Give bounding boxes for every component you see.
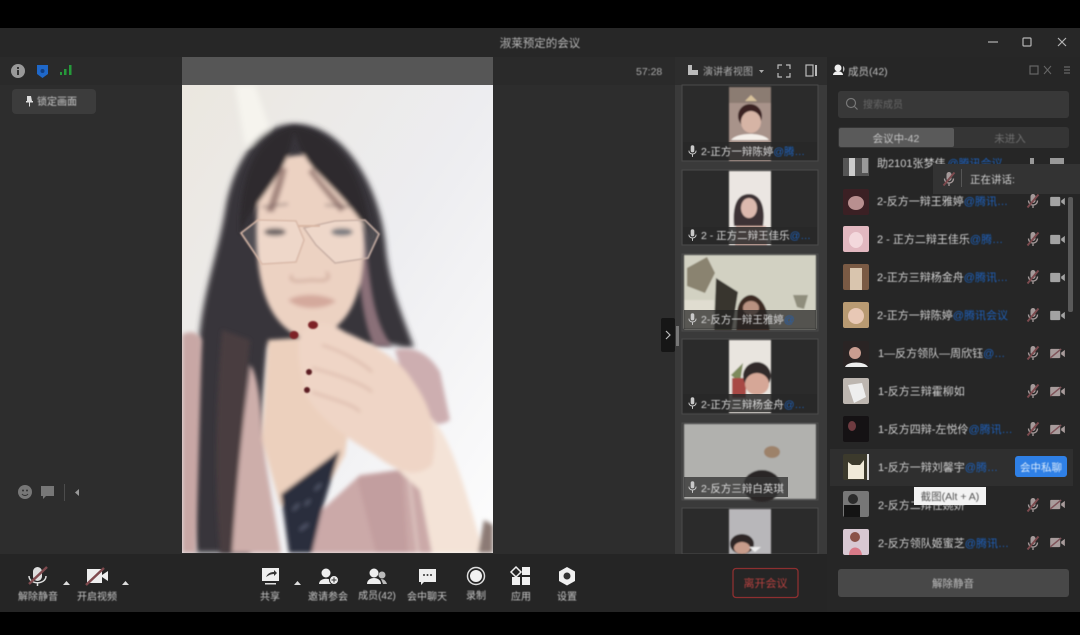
thumbnail 5 xyxy=(682,423,818,502)
face xyxy=(256,155,364,337)
lock view button xyxy=(12,89,96,114)
glasses xyxy=(241,220,304,264)
member row: 2-反方领队姬蜜芝: 2-反方领队姬蜜芝@腾讯… xyxy=(878,536,1009,550)
member tabs xyxy=(838,127,1069,148)
neck and chest xyxy=(262,335,352,505)
member row: 2-反方一辩王雅婷 xyxy=(843,189,1065,215)
unmute all button xyxy=(838,569,1069,597)
chat control: 会中聊天 xyxy=(407,590,447,603)
leave meeting button xyxy=(733,568,798,598)
top toolbar strip xyxy=(0,57,675,85)
member row: 1-反方三辩霍柳如: 1-反方三辩霍柳如 xyxy=(878,384,965,398)
member tabs: 未进入 xyxy=(994,133,1026,145)
invite control: 邀请参会 xyxy=(308,590,348,603)
lips xyxy=(288,295,336,308)
thumbnail 1 xyxy=(682,85,818,161)
record control xyxy=(466,568,486,602)
emoji and chat quick controls xyxy=(18,484,79,501)
hand xyxy=(298,324,435,472)
member tabs: 会议中-42 xyxy=(873,132,919,145)
member row: 2-正方一辩陈婷: 2-正方一辩陈婷@腾讯会议 xyxy=(877,308,1008,322)
nose xyxy=(291,272,329,281)
share control xyxy=(260,568,301,603)
member row: 2-正方三辩杨金舟 xyxy=(843,264,1065,290)
speaking indicator tooltip xyxy=(933,164,1080,194)
bangs xyxy=(240,126,295,235)
jacket right and lapel xyxy=(395,349,450,424)
chat control xyxy=(407,569,447,603)
timer and view controls: 57:28 xyxy=(636,66,662,78)
video header strip xyxy=(182,57,493,85)
start video control: 开启视频 xyxy=(77,590,117,603)
collapse handle xyxy=(661,318,679,352)
member row: 2 - 正方二辩王佳乐: 2 - 正方二辩王佳乐@腾… xyxy=(877,232,1003,246)
thumbnail 2 xyxy=(682,170,818,245)
window controls xyxy=(988,38,1066,46)
eyebrows and eyes xyxy=(262,204,349,207)
members panel xyxy=(827,57,1080,612)
members panel header: 成员(42) xyxy=(848,66,888,78)
member row highlighted: 1-反方一辩刘馨宇: 1-反方一辩刘馨宇@腾… xyxy=(878,460,998,474)
apps control xyxy=(511,567,531,603)
hair back xyxy=(190,124,414,553)
share control: 共享 xyxy=(260,590,280,603)
member row: 2-正方一辩陈婷 xyxy=(843,302,1065,328)
main speaker video xyxy=(182,85,493,553)
settings control: 设置 xyxy=(557,591,577,603)
member row: 2-正方三辩杨金舟: 2-正方三辩杨金舟@腾讯… xyxy=(877,270,1008,284)
member search box xyxy=(838,91,1069,118)
thumbnail 3: 2-反方一辩王雅婷@ xyxy=(701,313,795,326)
lock view button: 锁定画面 xyxy=(37,95,77,108)
thumbnail 5: 2-反方三辩白英琪 xyxy=(701,482,784,495)
member row: 1-反方三辩霍柳如 xyxy=(843,378,1065,404)
thumbnail 3 xyxy=(682,254,818,331)
thumbnail column xyxy=(661,85,827,554)
unmute all button: 解除静音 xyxy=(932,577,974,590)
thumbnail 1: 2-正方一辩陈婷@腾… xyxy=(701,145,805,158)
member row: 2-反方二辩任婉妍: 2-反方二辩任婉妍 xyxy=(878,498,965,512)
arm xyxy=(398,410,480,553)
member row highlighted: 1-反方一辩刘馨宇 xyxy=(830,449,1073,486)
member row: 助2101张梦伟 (clipped) xyxy=(843,156,1064,176)
hair streak tones xyxy=(216,330,250,553)
settings control xyxy=(557,567,577,603)
member row: 1—反方领队—周欣钰: 1—反方领队—周欣钰@… xyxy=(878,346,1005,360)
timer and view controls xyxy=(636,65,817,78)
nails xyxy=(290,331,298,339)
private chat button xyxy=(1015,456,1067,477)
member row: 2-反方领队姬蜜芝 xyxy=(843,529,1065,555)
timer and view controls: 演讲者视图 xyxy=(703,65,753,78)
members control xyxy=(358,568,396,602)
invite control xyxy=(308,568,348,603)
unmute control xyxy=(18,567,70,603)
jacket left xyxy=(182,332,202,553)
title bar xyxy=(0,28,1080,57)
screenshot tooltip xyxy=(914,487,986,505)
thumbnail 6 xyxy=(682,508,818,554)
thumbnail 4 xyxy=(682,339,818,414)
thumbnail 2: 2 - 正方二辩王佳乐@… xyxy=(701,229,811,242)
member row: 2 - 正方二辩王佳乐 xyxy=(843,226,1065,252)
thumbnail 4: 2-正方三辩杨金舟@… xyxy=(701,398,805,411)
panel scrollbar xyxy=(1068,197,1073,312)
speaking indicator tooltip: 正在讲话: xyxy=(970,173,1015,186)
member search box: 搜索成员 xyxy=(863,98,903,111)
record control: 录制 xyxy=(466,589,486,602)
member row: 2-反方二辩任婉妍 xyxy=(843,491,1065,517)
leave meeting button: 离开会议 xyxy=(744,576,788,590)
members control: 成员(42) xyxy=(358,590,396,602)
apps control: 应用 xyxy=(511,590,531,603)
unmute control: 解除静音 xyxy=(18,590,58,603)
member row: 1-反方四辩-左悦伶 xyxy=(843,416,1065,442)
member row: 1-反方四辩-左悦伶: 1-反方四辩-左悦伶@腾讯… xyxy=(878,422,1013,436)
start video control xyxy=(77,568,129,603)
title text: 淑莱预定的会议 xyxy=(500,36,581,50)
members panel header xyxy=(833,64,1070,78)
member row: 1—反方领队—周欣钰 xyxy=(843,341,1065,367)
screenshot tooltip: 截图(Alt + A) xyxy=(921,490,979,503)
bottom toolbar xyxy=(0,554,1080,612)
private chat button: 会中私聊 xyxy=(1020,461,1062,474)
dark inner top xyxy=(281,450,340,553)
status icons xyxy=(11,64,72,78)
member row: 助2101张梦伟 (clipped): 助2101张梦伟@腾讯会议 xyxy=(877,156,1003,170)
member row: 2-反方一辩王雅婷: 2-反方一辩王雅婷@腾讯… xyxy=(877,194,1008,208)
